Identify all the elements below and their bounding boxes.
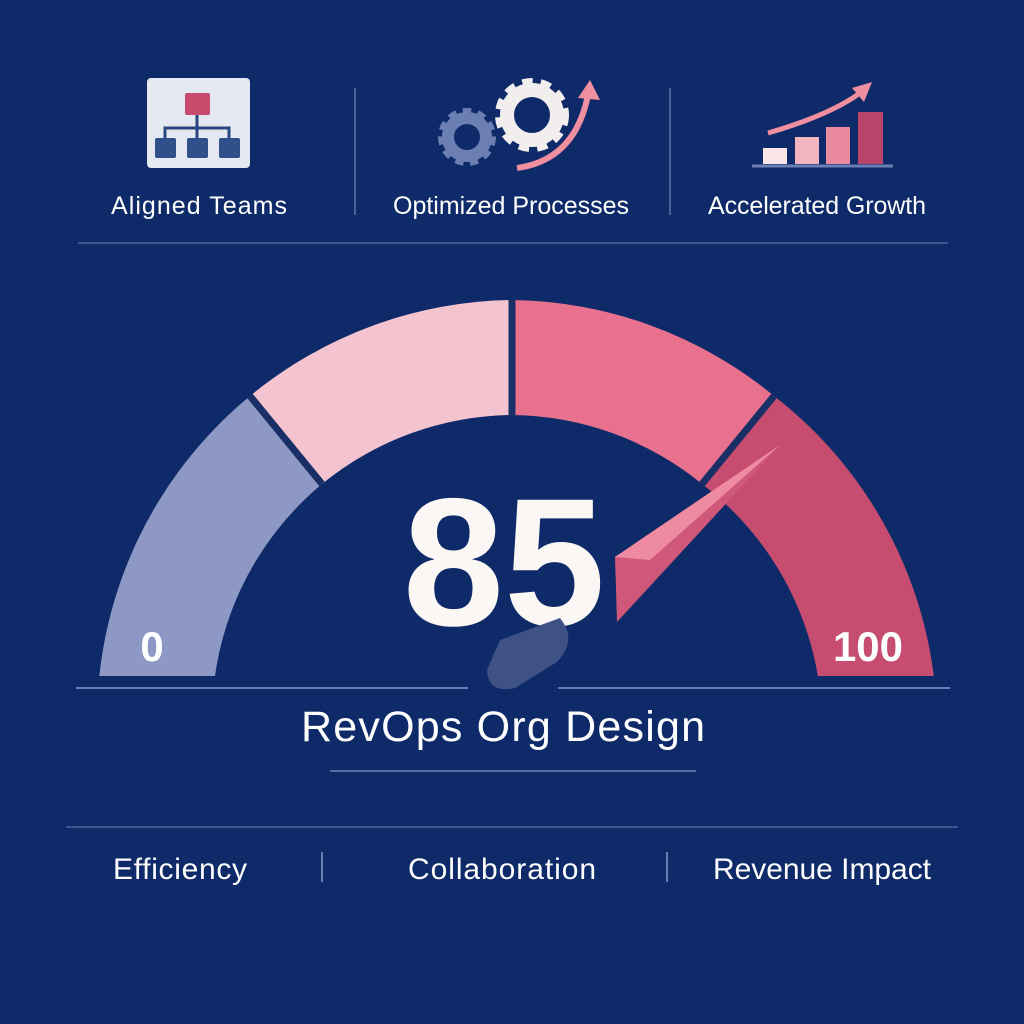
score 85: 85	[403, 460, 605, 664]
icon: growth bars	[752, 82, 893, 166]
bottom labels: Efficiency	[113, 853, 247, 886]
gauge	[99, 300, 934, 676]
icon: gears with arrow	[445, 80, 600, 168]
bottom labels: Collaboration	[408, 853, 596, 886]
label: Accelerated Growth: Accelerated Growth	[708, 192, 926, 220]
icon: org chart	[147, 78, 250, 168]
scale labels: 0	[140, 623, 164, 670]
label: Aligned Teams: Aligned Teams	[111, 192, 287, 220]
bottom labels	[113, 852, 932, 886]
needle	[487, 445, 780, 689]
label: Optimized Processes: Optimized Processes	[393, 192, 629, 220]
bottom labels: Revenue Impact	[713, 853, 932, 886]
title: RevOps Org Design	[301, 703, 705, 751]
gauge: 100	[833, 623, 903, 670]
